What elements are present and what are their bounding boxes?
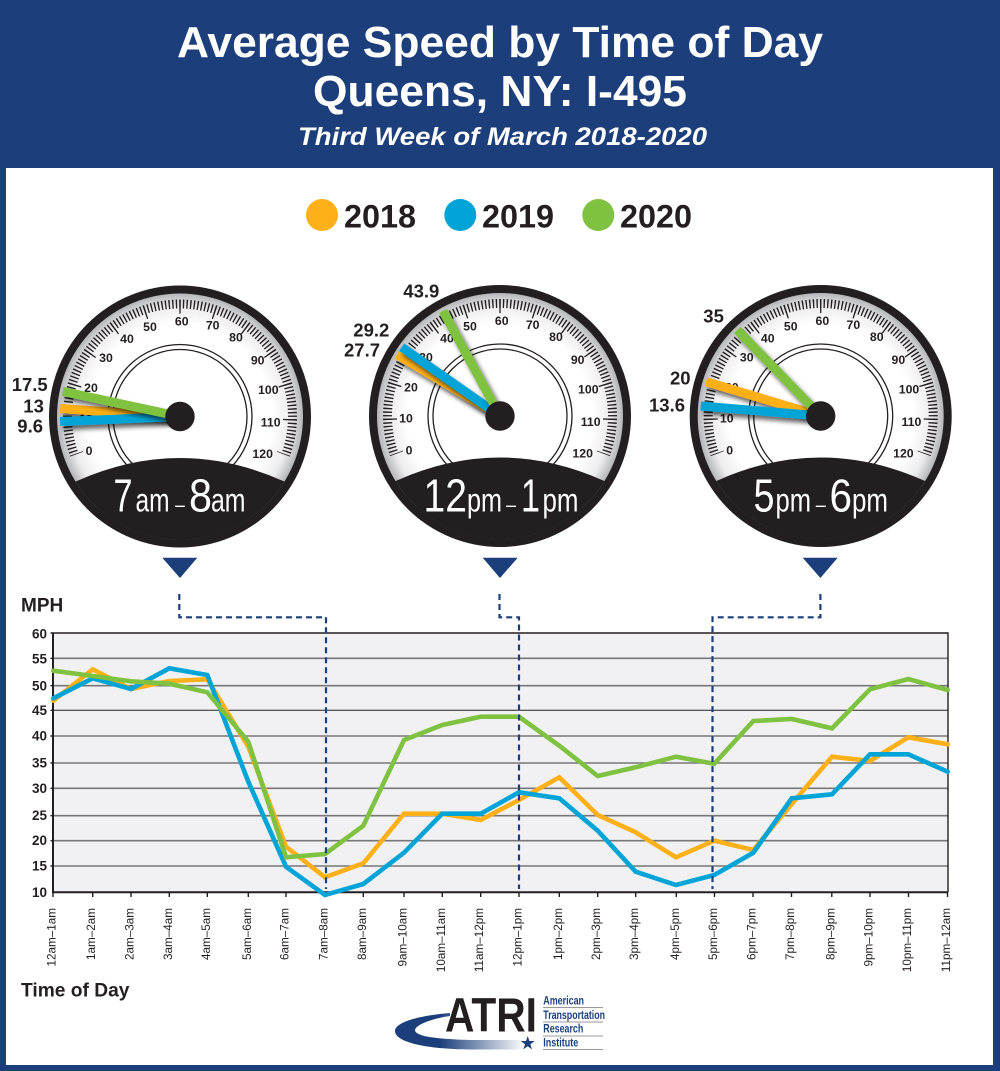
x-axis labels	[46, 908, 953, 972]
x-axis labels: 5pm–6pm	[707, 908, 720, 960]
gauge: 7am to 8am: 9.6	[17, 416, 43, 437]
gauge: 5pm to 6pm: 100	[899, 382, 919, 396]
gauge: 12pm to 1pm: 20	[404, 380, 418, 394]
gauge: 5pm to 6pm: pm	[852, 482, 888, 519]
gauge: 7am to 8am: 110	[261, 416, 281, 430]
gauge: 7am to 8am: 50	[143, 320, 157, 334]
gauge: 5pm to 6pm: 110	[901, 415, 921, 429]
x-axis labels: 12pm–1pm	[512, 908, 524, 966]
x-axis labels: 9am–10am	[396, 908, 410, 966]
logo: ATRI: Institute	[543, 1038, 578, 1050]
x-axis labels: 5am–6am	[241, 908, 254, 960]
gauge: 5pm to 6pm: 80	[870, 330, 884, 344]
gauge: 5pm to 6pm: –	[816, 495, 826, 517]
x-axis labels: 3am–4am	[162, 908, 175, 960]
gauge: 5pm to 6pm: pm	[776, 482, 811, 519]
y-axis labels: 50	[32, 678, 47, 694]
gauge: 12pm to 1pm	[344, 281, 631, 547]
x-axis labels: 10pm–11pm	[901, 908, 914, 972]
gauge: 12pm to 1pm: 60	[495, 314, 509, 328]
gauge: 7am to 8am: 80	[229, 330, 243, 344]
gauge: 5pm to 6pm: 60	[816, 314, 829, 328]
line chart: speed by hour	[32, 626, 953, 972]
gauge: 12pm to 1pm: 120	[572, 446, 593, 460]
legend: 2018	[344, 198, 416, 234]
x-axis labels: 7pm–8pm	[784, 908, 797, 960]
x-axis labels: 12am–1am	[46, 908, 58, 966]
title: Third Week of March 2018-2020	[298, 123, 707, 151]
gauge: 7am to 8am: 0	[86, 444, 93, 458]
title	[177, 18, 824, 151]
gauge: 12pm to 1pm: pm	[467, 482, 502, 519]
x-axis labels: 2pm–3pm	[590, 908, 603, 960]
gauge: 12pm to 1pm: 10	[399, 412, 413, 426]
gauge: 7am to 8am: –	[175, 495, 186, 517]
gauge: 7am to 8am: 10	[79, 412, 93, 426]
chart x-axis title: Time of Day	[21, 981, 130, 1002]
gauge: 5pm to 6pm: 20	[725, 380, 739, 394]
logo: ATRI: American	[543, 995, 584, 1007]
x-axis labels: 8pm–9pm	[824, 908, 837, 960]
gauge: 5pm to 6pm: 20	[670, 368, 691, 389]
legend: 2020	[620, 198, 692, 234]
legend	[306, 198, 692, 234]
gauge: 7am to 8am: 100	[258, 383, 279, 397]
x-axis labels: 6pm–7pm	[746, 908, 758, 960]
y-axis labels: 60	[32, 626, 47, 642]
gauge: 5pm to 6pm: 40	[761, 332, 775, 346]
gauge: 7am to 8am: 20	[84, 381, 98, 395]
gauge: 7am to 8am: am	[136, 482, 170, 519]
gauge: 12pm to 1pm: 110	[581, 415, 601, 429]
x-axis labels: 1pm–2pm	[552, 908, 565, 960]
gauge: 7am to 8am: 17.5	[12, 374, 48, 395]
x-axis labels: 10am–11am	[435, 908, 448, 972]
gauge: 12pm to 1pm: 90	[571, 353, 585, 367]
y-axis labels: 40	[32, 728, 47, 744]
gauge: 12pm to 1pm: 30	[419, 350, 433, 364]
gauge: 12pm to 1pm: 29.2	[353, 320, 389, 341]
dashed connector: 5pm gauge to chart	[712, 594, 820, 889]
x-axis labels: 3pm–4pm	[628, 908, 641, 960]
gauge: 5pm to 6pm: 5	[754, 470, 774, 522]
gauge: 7am to 8am: 60	[175, 314, 189, 328]
gauge: 12pm to 1pm: 70	[526, 318, 540, 332]
gauge: 12pm to 1pm: 1	[521, 470, 540, 522]
gauge: 12pm to 1pm: 0	[406, 444, 413, 458]
x-axis labels: 7am–8am	[318, 908, 330, 960]
gauge: 5pm to 6pm: 0	[726, 444, 733, 458]
arrow: down marker for 12pm gauge	[483, 558, 518, 578]
y-axis labels: 25	[32, 808, 47, 823]
x-axis labels: 6am–7am	[278, 908, 292, 960]
y-axis labels: 35	[32, 756, 47, 770]
gauge: 7am to 8am: 30	[99, 351, 113, 365]
logo: ATRI: ATRI	[445, 990, 537, 1043]
x-axis labels: 11pm–12am	[940, 908, 953, 972]
gauge: 12pm to 1pm: 50	[463, 320, 477, 334]
title: Average Speed by Time of Day	[177, 18, 824, 67]
chart y-axis title: MPH	[21, 596, 63, 617]
x-axis labels: 8am–9am	[356, 908, 369, 960]
gauge: 5pm to 6pm	[649, 285, 952, 547]
gauge: 7am to 8am: 90	[251, 354, 265, 368]
series: 2018	[53, 669, 948, 877]
x-axis labels: 2am–3am	[124, 908, 136, 960]
y-axis labels: 55	[32, 652, 47, 666]
gauge: 7am to 8am: 70	[206, 318, 220, 332]
x-axis labels: 4pm–5pm	[669, 908, 682, 960]
title: Queens, NY: I-495	[313, 67, 687, 116]
series: 2019	[53, 668, 948, 895]
legend: 2019	[482, 198, 554, 234]
gauge: 7am to 8am: 40	[120, 332, 134, 346]
gauge: 12pm to 1pm: 100	[578, 382, 599, 396]
y-axis labels: 10	[32, 885, 47, 900]
arrow: down marker for 7am gauge	[162, 558, 197, 578]
gauge: 12pm to 1pm: 80	[549, 330, 563, 344]
logo: ATRI	[395, 990, 605, 1050]
dashed connector: 7am gauge to chart	[179, 594, 326, 889]
gauge: 12pm to 1pm: 27.7	[344, 340, 380, 361]
y-axis labels	[32, 626, 47, 900]
gauge: 5pm to 6pm: 35	[703, 305, 724, 326]
series: 2020	[53, 671, 948, 857]
gauge: 5pm to 6pm: 30	[740, 350, 754, 364]
gauge: 5pm to 6pm: 90	[892, 353, 905, 367]
x-axis labels: 11am–12pm	[473, 908, 486, 972]
gauge: 12pm to 1pm: –	[506, 495, 517, 517]
gauge: 12pm to 1pm: 43.9	[403, 281, 439, 302]
dashed connector: 12pm gauge to chart	[500, 594, 519, 889]
arrow: down marker for 5pm gauge	[803, 558, 838, 578]
y-axis labels: 20	[32, 833, 47, 848]
gauge: 12pm to 1pm: 12	[424, 470, 467, 522]
gauge: 7am to 8am: 13	[23, 396, 44, 417]
gauge: 7am to 8am: 8	[189, 470, 212, 522]
logo: ATRI: Research	[543, 1024, 583, 1036]
gauge: 5pm to 6pm: 10	[720, 412, 734, 426]
gauge: 12pm to 1pm: pm	[542, 482, 578, 519]
x-axis labels: 9pm–10pm	[862, 908, 876, 966]
gauge: 5pm to 6pm: 120	[893, 446, 914, 460]
gauge: 7am to 8am: am	[211, 482, 246, 519]
gauge: 5pm to 6pm: 6	[830, 470, 852, 522]
gauge: 7am to 8am	[12, 286, 311, 548]
gauge: 5pm to 6pm: 50	[784, 320, 798, 334]
gauge: 7am to 8am: 120	[252, 447, 273, 461]
gauge: 5pm to 6pm: 13.6	[649, 395, 685, 416]
logo: ATRI: Transportation	[543, 1010, 605, 1022]
x-axis labels: 1am–2am	[85, 908, 98, 960]
gauge: 5pm to 6pm: 70	[847, 318, 860, 332]
x-axis labels: 4am–5am	[200, 908, 213, 960]
gauge: 7am to 8am: 7	[114, 470, 132, 522]
y-axis labels: 45	[32, 703, 47, 718]
y-axis labels: 15	[32, 858, 47, 874]
y-axis labels: 30	[32, 781, 47, 796]
gauge: 12pm to 1pm: 40	[440, 332, 454, 346]
